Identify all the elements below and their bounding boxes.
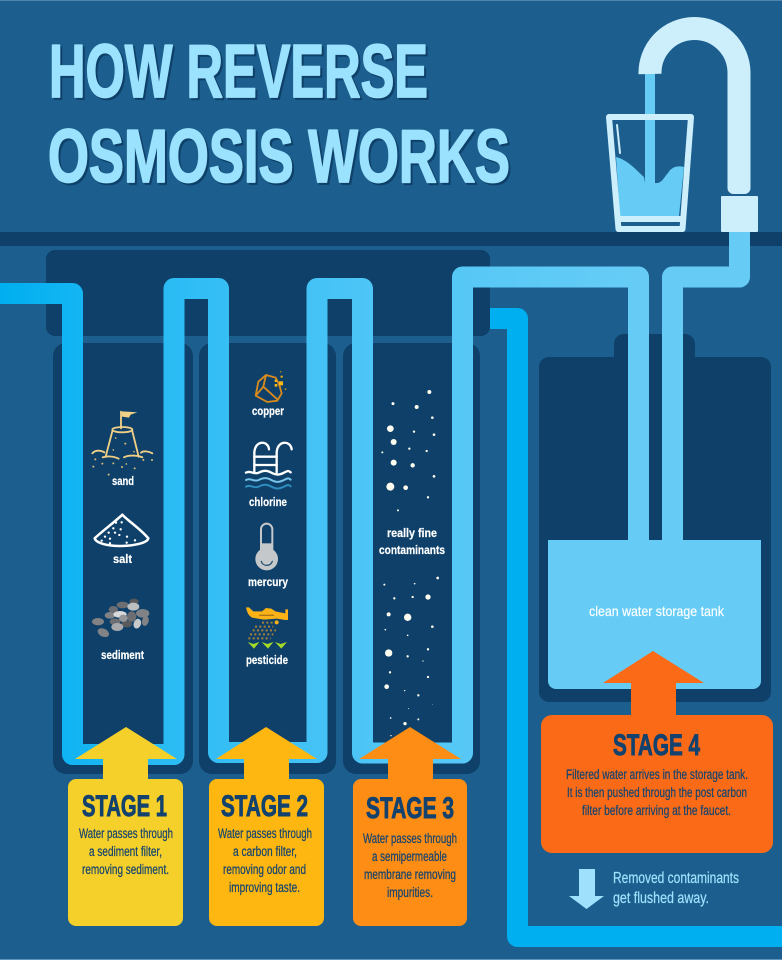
icon: sandcastle (92, 411, 153, 476)
stage 2 text: Water passes through (218, 826, 312, 841)
stage 4 text: filter before arriving at the faucet. (582, 803, 731, 818)
stage 4 heading: STAGE 4 (613, 729, 700, 762)
stage 3 heading: STAGE 3 (366, 792, 454, 825)
main water pipe (0, 277, 638, 754)
icon: thermometer (255, 524, 278, 570)
title (48, 29, 512, 200)
stage 1 text (79, 826, 173, 877)
title: OSMOSIS WORKS (50, 116, 512, 200)
icon: faucet (650, 28, 758, 232)
stage 3 text: membrane removing (364, 867, 456, 882)
icon: salt pile (95, 515, 148, 546)
faucet supply pipe (672, 228, 740, 545)
label: sediment: sediment (101, 648, 144, 662)
stage 3 text: Water passes through (363, 831, 457, 846)
label: really fine contaminants (379, 526, 445, 557)
panel: stage 3 (353, 727, 467, 926)
label: chlorine: chlorine (249, 495, 287, 509)
stage 2 text: a carbon filter, (233, 844, 297, 859)
stage 2 text: removing odor and (223, 862, 306, 877)
icon: pool ladder (246, 443, 292, 489)
icon: glass of water (609, 117, 691, 229)
label: mercury: mercury (248, 575, 288, 589)
stage 2 text: improving taste. (229, 880, 300, 895)
panel: stage 2 (209, 727, 324, 926)
stage 3 text: impurities. (387, 885, 433, 900)
stage 1 text: removing sediment. (82, 862, 169, 877)
label: really fine contaminants: really fine (387, 526, 437, 540)
label: really fine contaminants: contaminants (379, 543, 445, 557)
water stream (645, 70, 655, 184)
icon: crop duster plane (246, 607, 288, 649)
panel: stage 1 (68, 727, 183, 926)
stage 2 text (218, 826, 312, 895)
flush note: get flushed away. (613, 890, 709, 907)
label: salt: salt (113, 552, 132, 566)
tank label: clean water storage tank (589, 603, 725, 619)
stage 1 heading: STAGE 1 (82, 790, 167, 823)
flush note: Removed contaminants (613, 870, 739, 887)
panel: stage 4 (541, 651, 773, 853)
flush note (613, 870, 739, 907)
arrow: flush down (569, 869, 604, 909)
icon: copper nugget (256, 371, 286, 402)
icon: sediment rocks (92, 599, 150, 639)
title: OSMOSIS WORKS (48, 114, 510, 198)
stage 1 text: Water passes through (79, 826, 173, 841)
panel: storage tank housing (539, 334, 771, 702)
panel: filter housings (46, 250, 490, 774)
label: pesticide: pesticide (246, 653, 288, 667)
particles: fine contaminants top (381, 390, 435, 511)
label: copper: copper (252, 404, 284, 418)
flush pipe (490, 318, 782, 936)
storage tank (548, 540, 761, 689)
particles: fine contaminants bottom (383, 577, 439, 736)
stage 3 text (363, 831, 457, 900)
stage 3 text: a semipermeable (372, 849, 447, 864)
title: HOW REVERSE (51, 31, 430, 115)
title: HOW REVERSE (49, 29, 428, 113)
stage 1 text: a sediment filter, (89, 844, 162, 859)
label: sand: sand (112, 474, 134, 488)
stage 4 text (566, 767, 748, 818)
stage 2 heading: STAGE 2 (221, 790, 308, 823)
